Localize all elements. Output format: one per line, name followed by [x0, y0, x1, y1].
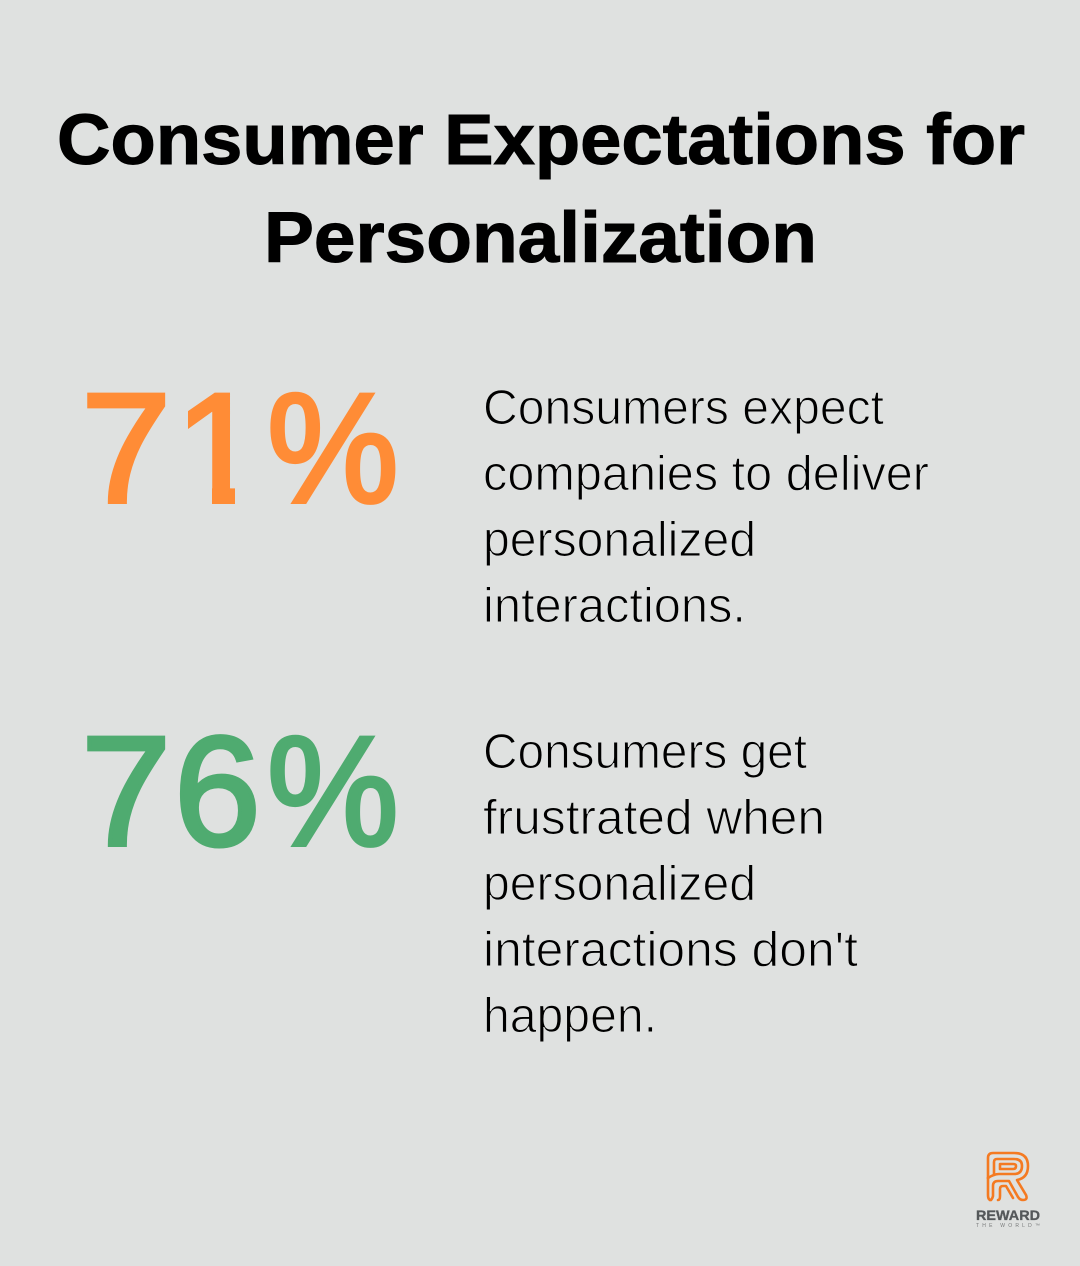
wordmark: REWARD [976, 1208, 1040, 1223]
title [57, 101, 1025, 278]
stat: 76% [81, 704, 399, 879]
text block: consumers get frustrated: happen. [483, 989, 657, 1043]
text block: consumers expect personalized interactions: Consumers expect [483, 381, 884, 435]
icon: R mark [988, 1153, 1028, 1200]
title: Consumer Expectations for [57, 101, 1025, 180]
text block: consumers get frustrated: frustrated when [483, 791, 825, 845]
text block: consumers expect personalized interactions: interactions. [483, 579, 746, 633]
title: Personalization [264, 199, 817, 278]
stat: 76%: % [267, 705, 399, 879]
stat: 71%: % [267, 362, 399, 536]
text block: consumers get frustrated: Consumers get [483, 725, 807, 779]
stat: 71%: 7 [81, 361, 171, 535]
text block: consumers get frustrated: personalized [483, 857, 756, 911]
tagline: THE WORLD™ [976, 1223, 1040, 1229]
text block: consumers expect personalized interactions: companies to deliver [483, 447, 929, 501]
stat: 76%: 7 [81, 704, 171, 878]
stat: 76%: 6 [174, 705, 261, 879]
stat: 71%: 1 [175, 362, 262, 536]
text block: consumers get frustrated: interactions don't [483, 923, 858, 977]
text block: consumers expect personalized interactions [483, 381, 929, 633]
text block: consumers expect personalized interactions: personalized [483, 513, 756, 567]
logo: Reward the World [976, 1153, 1040, 1229]
text block: consumers get frustrated [483, 725, 858, 1043]
stat: 71% [87, 392, 396, 505]
